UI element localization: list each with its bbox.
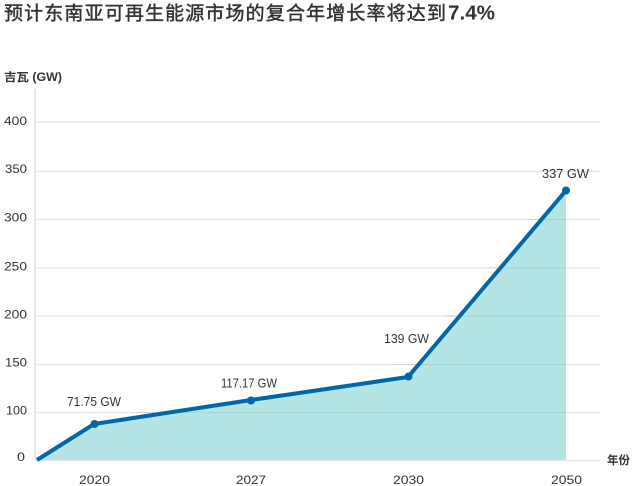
y-axis labels (4, 114, 27, 464)
y-axis labels: 400 (4, 114, 27, 128)
y-axis labels: 350 (5, 162, 27, 176)
y-axis labels: 0 (17, 450, 25, 464)
y-axis title: 吉瓦 (GW) (4, 70, 62, 84)
y-axis labels: 250 (4, 260, 27, 274)
area under curve (37, 190, 566, 460)
x-axis labels (79, 473, 582, 486)
grid lines over area (135, 220, 566, 412)
title: 预计东南亚可再生能源市场的复合年增长率将达到 (4, 2, 447, 24)
line series (37, 186, 570, 460)
y-axis labels: 300 (4, 210, 27, 224)
y-axis labels: 150 (5, 356, 27, 370)
y-axis labels: 200 (4, 308, 27, 322)
data labels: 337 GW (542, 167, 589, 181)
grid lines (35, 89, 600, 460)
x-axis title: 年份 (607, 453, 630, 467)
title: 7.4% (448, 2, 495, 24)
data labels: 139 GW (384, 332, 429, 346)
data labels (67, 167, 589, 409)
data labels: 71.75 GW (67, 395, 121, 409)
y-axis labels: 100 (6, 404, 27, 418)
data labels: 117.17 GW (221, 376, 277, 390)
